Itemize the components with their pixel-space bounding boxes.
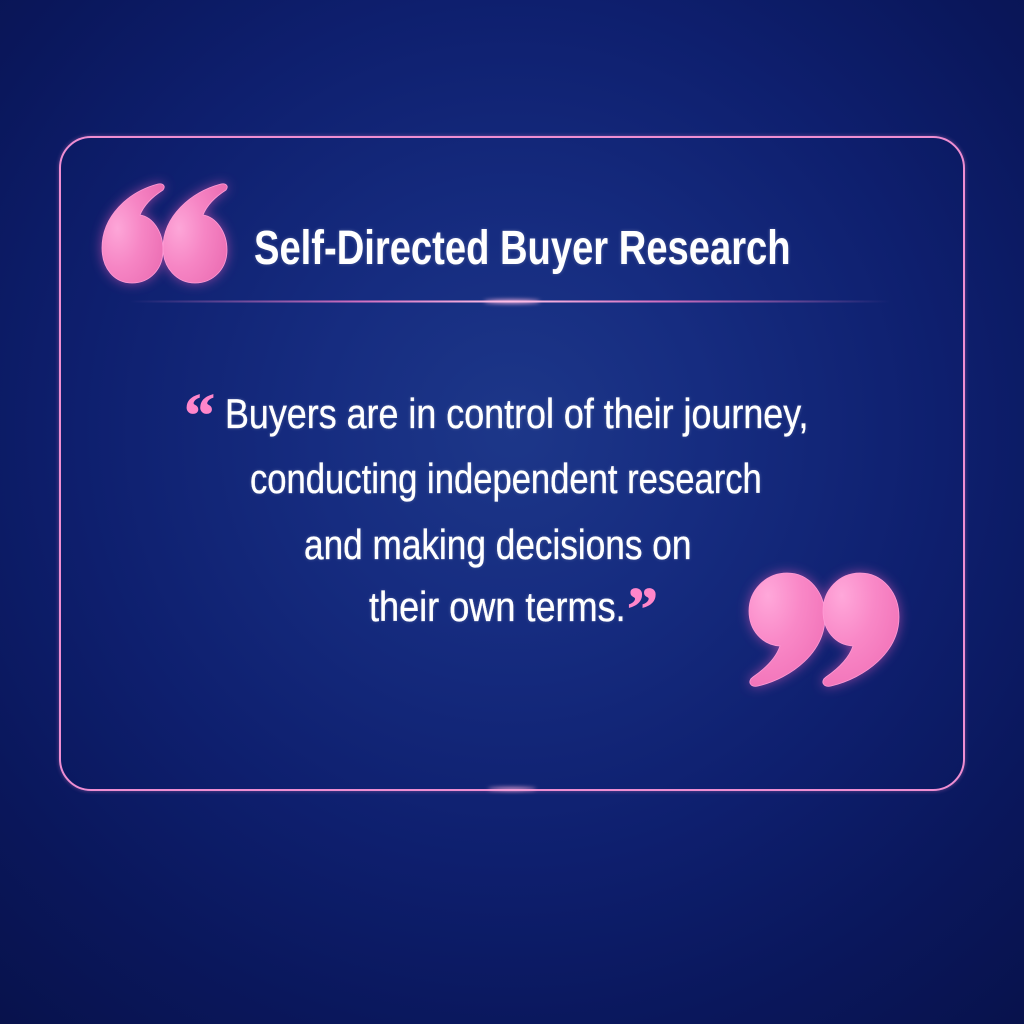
icon: large opening quote [102, 184, 227, 283]
quote text line 1: Buyers are in control of their journey, [225, 390, 808, 437]
icon: large closing quote [749, 573, 899, 686]
small closing quote mark: ” [627, 576, 658, 644]
bottom border glow [488, 788, 536, 790]
panel: quote card [59, 136, 965, 791]
divider under title [130, 300, 890, 303]
quote text line 2: conducting independent research [250, 455, 762, 502]
title: Self-Directed Buyer Research [254, 222, 791, 275]
quote text line 3: and making decisions on [304, 521, 691, 568]
small opening quote mark: “ [184, 382, 215, 450]
quote text line 4: their own terms. [369, 583, 626, 630]
